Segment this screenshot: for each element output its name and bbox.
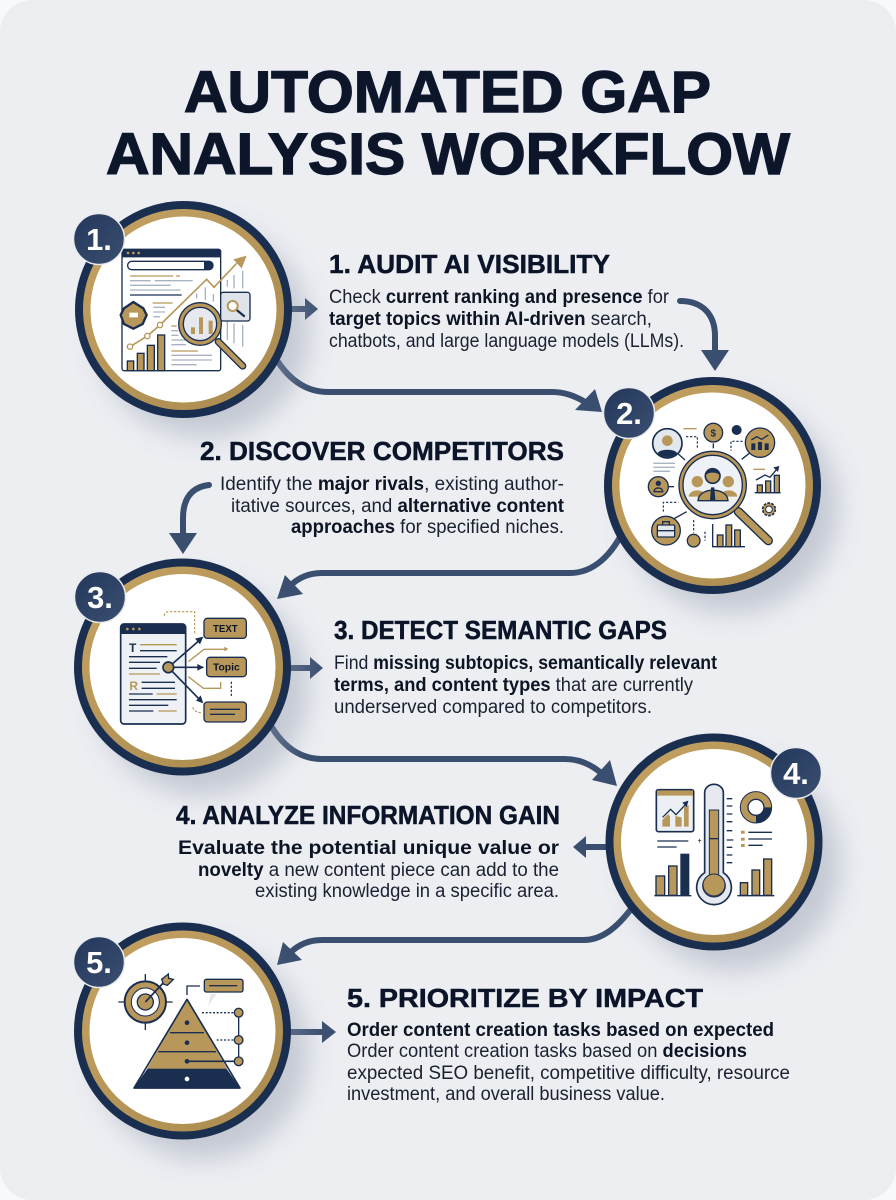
heading: detect semantic gaps: 3. DETECT SEMANTIC GAPS	[334, 615, 667, 645]
panel: step 2 circle	[604, 377, 838, 613]
text block: step 3: Find missing subtopics, semantically relevant	[334, 653, 718, 674]
text block: step 5	[347, 983, 790, 1105]
arrow: text 1 to step 2	[680, 301, 729, 371]
text block: step 4: Evaluate the potential unique value or	[178, 838, 560, 859]
icon: document topic map: T	[129, 641, 137, 655]
badge: 3	[74, 572, 126, 622]
arrow: connector step 3 to step 4	[264, 712, 617, 786]
text block: step 4: existing knowledge in a specific area.	[255, 881, 559, 902]
text block: step 5: expected SEO benefit, competitive difficulty, resource	[347, 1063, 790, 1084]
badge: 3: 3.	[87, 580, 113, 615]
panel: step 5 circle	[74, 922, 308, 1159]
arrow: connector step 4 to step 5	[277, 905, 634, 965]
icon: target and priority pyramid	[118, 974, 243, 1088]
arrow: step 3 to text	[288, 657, 323, 679]
text block: step 3: underserved compared to competitors.	[334, 697, 652, 718]
badge: 1: 1.	[86, 222, 112, 257]
badge: 2	[604, 388, 654, 438]
title: ANALYSIS WORKFLOW	[106, 122, 790, 187]
text block: step 3	[334, 615, 718, 718]
icon: competitor magnifier network	[648, 423, 781, 547]
badge: 5	[74, 936, 124, 988]
badge: 5: 5.	[86, 945, 112, 980]
heading: discover competitors: 2. DISCOVER COMPETITORS	[200, 436, 564, 466]
panel: step 4 circle	[606, 734, 840, 970]
arrow: text 2 to step 3	[169, 485, 209, 554]
icon: document topic map: TEXT	[213, 624, 238, 635]
text block: step 1: Check current ranking and presence for	[329, 287, 670, 308]
badge: 4	[770, 748, 822, 798]
badge: 1	[74, 214, 124, 264]
arrow: step 5 to text	[288, 1021, 336, 1043]
icon: thermometer and charts	[654, 784, 774, 905]
heading: analyze information gain: 4. ANALYZE INFORMATION GAIN	[176, 800, 560, 830]
text block: step 2: itative sources, and alternative content	[231, 496, 565, 517]
text block: step 3: terms, and content types that are currently	[334, 675, 693, 696]
icon: document topic map: Topic	[213, 663, 240, 674]
icon: document topic map: R	[129, 679, 138, 693]
panel: step 3 circle	[74, 558, 308, 795]
text block: step 1: chatbots, and large language models (LLMs).	[329, 331, 684, 352]
text block: step 4: novelty a new content piece can add to the	[198, 860, 559, 881]
heading: audit AI visibility: 1. AUDIT AI VISIBILITY	[329, 249, 610, 279]
icon: competitor magnifier network: $	[711, 428, 717, 439]
arrow: step 1 to text	[288, 298, 318, 320]
text block: step 2	[200, 436, 565, 538]
panel: step 1 circle	[74, 201, 309, 437]
badge: 4: 4.	[783, 756, 809, 791]
title	[106, 60, 790, 187]
icon: document topic map	[121, 612, 246, 724]
text block: step 2: approaches for specified niches.	[291, 517, 564, 538]
arrow: connector step 1 to step 2	[270, 348, 602, 412]
title: AUTOMATED GAP	[184, 60, 711, 125]
text block: step 5: Order content creation tasks based on expected	[347, 1020, 774, 1041]
arrow: connector step 2 to step 3	[277, 525, 626, 599]
text block: step 2: Identify the major rivals, existing author-	[220, 474, 564, 495]
text block: step 5: Order content creation tasks based on decisions	[347, 1041, 747, 1062]
icon: browser audit with magnifier	[121, 249, 250, 371]
text block: step 1	[329, 249, 684, 352]
text block: step 4	[176, 800, 560, 902]
text block: step 5: investment, and overall business value.	[347, 1084, 665, 1105]
badge: 2: 2.	[616, 396, 642, 431]
arrow: step 4 to text	[573, 836, 608, 858]
text block: step 1: target topics within AI-driven search,	[329, 309, 652, 330]
heading: prioritize by impact: 5. PRIORITIZE BY IMPACT	[347, 983, 703, 1013]
